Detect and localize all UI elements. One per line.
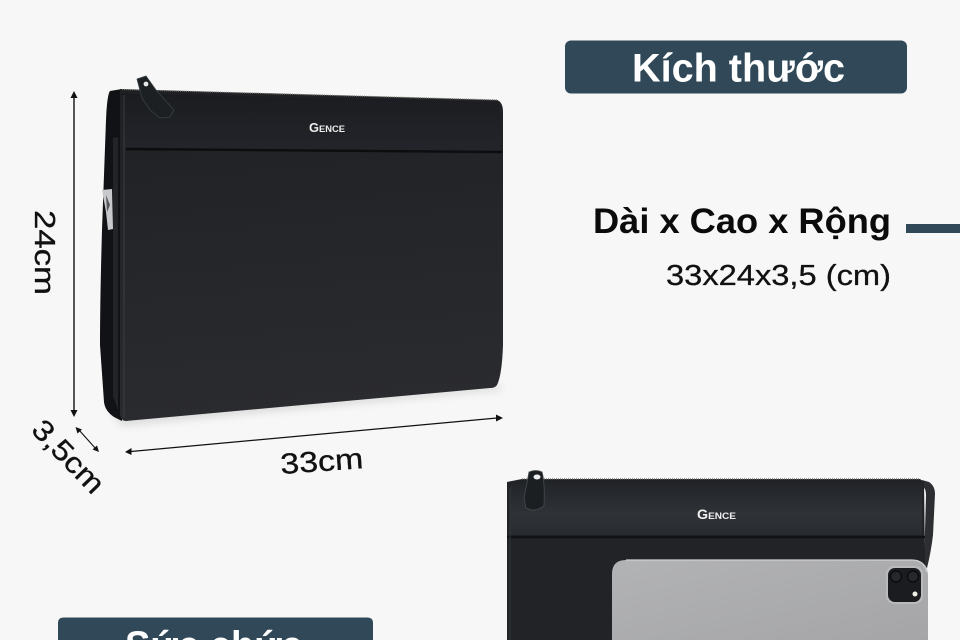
zipper line xyxy=(122,90,497,100)
side metal zipper xyxy=(102,189,113,230)
text: dimensions label: Dài x Cao x Rộng xyxy=(593,202,891,241)
text: dimensions value: 33x24x3,5 (cm) xyxy=(666,260,891,292)
accent bar xyxy=(906,224,960,233)
tablet xyxy=(612,560,928,640)
bag top band xyxy=(510,484,922,535)
bag top band xyxy=(122,93,500,152)
seam xyxy=(507,536,925,538)
zip pull tab xyxy=(137,76,174,118)
handle loop xyxy=(922,480,935,568)
bag body xyxy=(507,479,926,640)
arrow: height xyxy=(70,91,78,417)
label: 3,5cm: 3,5cm xyxy=(25,414,111,501)
label: 33cm: 33cm xyxy=(279,443,364,481)
bag left gusset xyxy=(100,89,122,421)
seam xyxy=(126,149,502,152)
heading: Kích thước: Kích thước xyxy=(632,46,845,90)
photo: bag holding a tablet xyxy=(507,470,935,640)
heading: Sức chứa (cropped) xyxy=(58,618,373,640)
zipper line xyxy=(522,478,920,480)
arrow: depth xyxy=(76,427,99,452)
bag front panel xyxy=(120,89,503,421)
zip pull tab xyxy=(524,470,544,510)
heading: Kích thước xyxy=(565,40,907,94)
logo: Gence: GENCE xyxy=(309,120,345,135)
label: 24cm: 24cm xyxy=(28,210,60,295)
photo: black document bag, front view xyxy=(100,76,503,426)
logo: Gence: GENCE xyxy=(697,507,736,522)
camera module xyxy=(886,566,923,604)
arrow: length xyxy=(125,414,503,455)
